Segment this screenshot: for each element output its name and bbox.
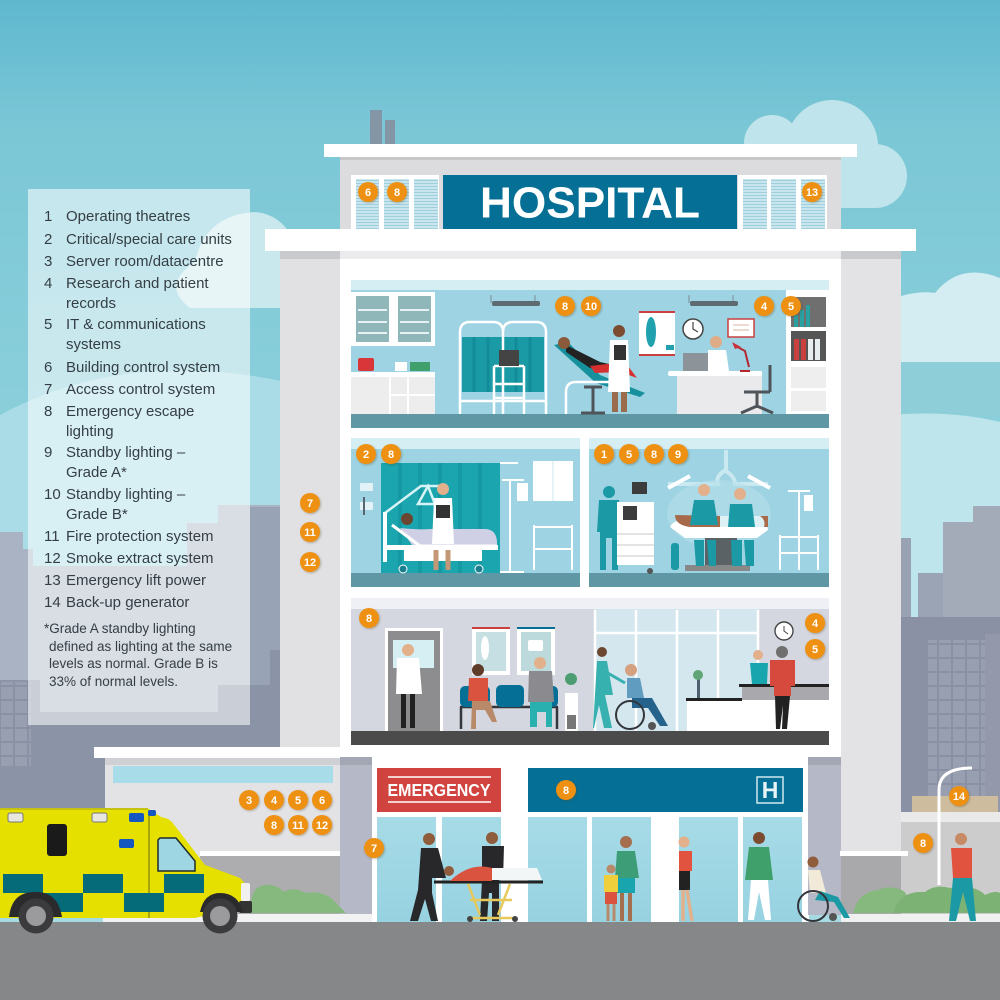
legend list: 10	[44, 486, 61, 503]
numbered badges: 14	[953, 791, 966, 803]
man walking	[745, 832, 773, 920]
woman walking	[678, 836, 692, 921]
legend list: 8	[44, 403, 52, 420]
clouds	[176, 100, 1000, 362]
examination chair and patient	[554, 337, 645, 414]
vents right	[738, 175, 827, 229]
seated man	[528, 657, 554, 727]
hospital sign	[443, 175, 737, 229]
wheelchair user	[798, 856, 850, 921]
legend list: lighting	[66, 423, 114, 440]
legend list: 6	[44, 359, 52, 376]
curtain screen	[460, 322, 546, 414]
surgeons	[671, 484, 755, 570]
numbered badges: 9	[675, 449, 681, 461]
vents left	[351, 175, 439, 229]
wall clock	[775, 622, 793, 640]
legend list: Grade B*	[66, 506, 128, 523]
wall sockets	[360, 483, 373, 515]
IV stand	[500, 480, 527, 572]
legend list: Emergency escape	[66, 403, 194, 420]
legend list: Building control system	[66, 359, 220, 376]
legend list: Standby lighting –	[66, 444, 186, 461]
numbered badges: 11	[292, 820, 304, 832]
legend list: 2	[44, 231, 52, 248]
legend footnote: 33% of normal levels.	[49, 674, 178, 689]
blue entrance sign	[528, 768, 803, 812]
legend list: Smoke extract system	[66, 550, 214, 567]
side trolley	[534, 525, 572, 570]
city skyline right	[901, 506, 1000, 812]
legend list: systems	[66, 336, 121, 353]
roof slab	[324, 144, 857, 157]
waiting chairs	[460, 685, 558, 729]
trolley with laptop	[494, 350, 524, 414]
wall clock	[683, 319, 703, 339]
numbered badges: 7	[307, 498, 313, 510]
numbered badges: 5	[626, 449, 632, 461]
street lamp	[939, 768, 972, 885]
numbered badges: 4	[761, 301, 768, 313]
legend list: 3	[44, 253, 52, 270]
legend footnote: levels as normal. Grade B is	[49, 656, 218, 671]
numbered badges: 8	[651, 449, 657, 461]
legend list: Back-up generator	[66, 594, 189, 611]
numbered badges: 5	[812, 644, 818, 656]
door with doctor	[385, 628, 443, 731]
emergency sign: EMERGENCY	[388, 780, 491, 800]
legend list: Fire protection system	[66, 528, 214, 545]
numbered badges: 6	[319, 795, 325, 807]
operating table and patient	[670, 515, 768, 571]
legend list: 9	[44, 444, 52, 461]
office chair	[741, 365, 773, 413]
top storey wall	[340, 157, 841, 229]
upper slab	[265, 229, 916, 251]
family: mother and child	[604, 836, 639, 921]
operating theatre	[589, 438, 829, 587]
numbered badges: 8	[366, 613, 372, 625]
road	[0, 922, 1000, 1000]
doctor at desk	[668, 336, 762, 414]
numbered badges: 8	[920, 838, 926, 850]
legend list: Emergency lift power	[66, 572, 206, 589]
hospital sign: HOSPITAL	[480, 180, 700, 228]
emergency sign	[377, 768, 501, 812]
legend list: IT & communications	[66, 316, 206, 333]
entrance windows	[377, 817, 802, 923]
numbered badges: 11	[304, 527, 316, 539]
numbered badges: 6	[365, 187, 371, 199]
shelves and files	[786, 290, 829, 414]
legend list: 11	[44, 528, 60, 545]
legend panel	[28, 189, 250, 725]
legend list: 1	[44, 208, 52, 225]
numbered badges: 8	[388, 449, 394, 461]
numbered badges: 13	[806, 187, 818, 199]
legend list: Grade A*	[66, 464, 127, 481]
ambulance wheels	[9, 892, 243, 934]
numbered badges: 8	[562, 301, 568, 313]
ground floor facade	[340, 745, 841, 923]
body chart poster	[639, 311, 675, 356]
numbered badges: 8	[563, 785, 569, 797]
legend footnote: defined as lighting at the same	[49, 639, 232, 654]
legend list: Standby lighting –	[66, 486, 186, 503]
numbered badges: 8	[394, 187, 400, 199]
legend list: Access control system	[66, 381, 215, 398]
legend list: 12	[44, 550, 61, 567]
certificate	[728, 319, 754, 337]
annex building right	[840, 796, 1000, 923]
numbered badges: 1	[601, 449, 607, 461]
numbered badges: 12	[316, 820, 328, 832]
surgical lights	[667, 450, 771, 548]
hospital bed and patient	[383, 486, 498, 573]
seated woman	[468, 664, 497, 729]
third floor clinic	[351, 280, 829, 428]
wall cabinet	[533, 461, 573, 501]
numbered badges: 3	[246, 795, 252, 807]
numbered badges: 12	[304, 557, 316, 569]
plant stand	[565, 673, 578, 731]
curtain	[381, 462, 518, 573]
legend list: 4	[44, 275, 52, 292]
nurse pushing wheelchair	[593, 647, 668, 730]
legend list: Operating theatres	[66, 208, 190, 225]
legend list: Server room/datacentre	[66, 253, 224, 270]
numbered badges: 7	[371, 843, 377, 855]
IV stand and shelf	[780, 490, 818, 570]
main building walls	[280, 250, 901, 853]
window wall	[594, 609, 759, 731]
receptionist and visitor	[750, 646, 795, 729]
city skyline left	[0, 505, 280, 812]
standing doctor female	[608, 325, 630, 412]
ambulance chequers	[3, 874, 204, 912]
numbered badges: 5	[788, 301, 794, 313]
legend footnote	[44, 621, 232, 689]
legend list: records	[66, 295, 116, 312]
paramedics with stretcher	[410, 832, 543, 922]
posters	[472, 627, 555, 675]
legend list: 14	[44, 594, 61, 611]
nurse	[432, 483, 454, 570]
ceiling lamps	[491, 295, 738, 306]
legend list	[44, 208, 232, 611]
numbered badges	[239, 182, 969, 858]
anaesthetist	[597, 486, 622, 570]
shrubs right	[853, 887, 1000, 913]
blue entrance sign: H	[762, 777, 778, 803]
reception desk	[686, 670, 829, 731]
legend list: Research and patient	[66, 275, 209, 292]
numbered badges: 4	[271, 795, 278, 807]
ambulance	[0, 808, 252, 934]
numbered badges: 2	[363, 449, 369, 461]
legend list: Critical/special care units	[66, 231, 232, 248]
anaesthesia cart	[617, 482, 654, 574]
ambulance windows and lights	[8, 810, 252, 913]
critical care ward	[351, 438, 580, 587]
first floor waiting area	[351, 598, 829, 745]
legend list: 7	[44, 381, 52, 398]
pedestrian right	[949, 833, 976, 921]
numbered badges: 4	[812, 618, 819, 630]
legend list: 13	[44, 572, 61, 589]
annex building left	[94, 747, 373, 923]
numbered badges: 8	[271, 820, 277, 832]
medicine cabinets	[351, 292, 435, 414]
numbered badges: 5	[295, 795, 301, 807]
shrubs left	[250, 885, 346, 913]
legend list: 5	[44, 316, 52, 333]
chimneys	[370, 110, 395, 145]
numbered badges: 10	[585, 301, 597, 313]
legend footnote: *Grade A standby lighting	[44, 621, 196, 636]
